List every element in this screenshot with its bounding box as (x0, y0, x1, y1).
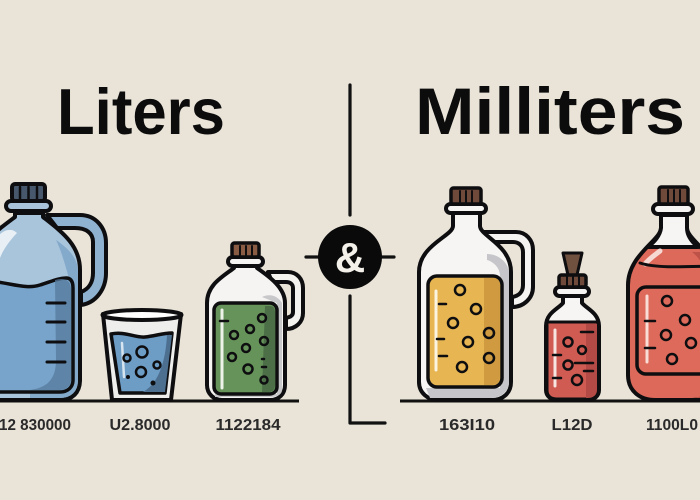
heading: Liters: Liters (57, 75, 225, 148)
icon: large blue jug (0, 184, 106, 400)
label: large blue jug: 12 830000 (0, 417, 71, 434)
central divider with ampersand badge: & (335, 234, 365, 281)
icon: green jug (207, 243, 303, 400)
right shelf line (400, 400, 700, 402)
label: large red bottle: 1100L0 (646, 417, 698, 434)
label: green jug: 1122184 (216, 417, 281, 434)
icon: glass of water (102, 310, 182, 400)
icon: large red bottle (628, 187, 700, 400)
icon: yellow liquid jug (419, 188, 533, 400)
left shelf line (0, 400, 299, 402)
heading: Milliters: Milliters (415, 74, 685, 148)
label: yellow jug: 163I10 (439, 417, 495, 434)
label: small red bottle: L12D (552, 417, 592, 434)
central divider with ampersand badge (306, 85, 394, 423)
label: glass: U2.8000 (110, 417, 171, 434)
icon: small red dropper bottle (546, 253, 599, 400)
